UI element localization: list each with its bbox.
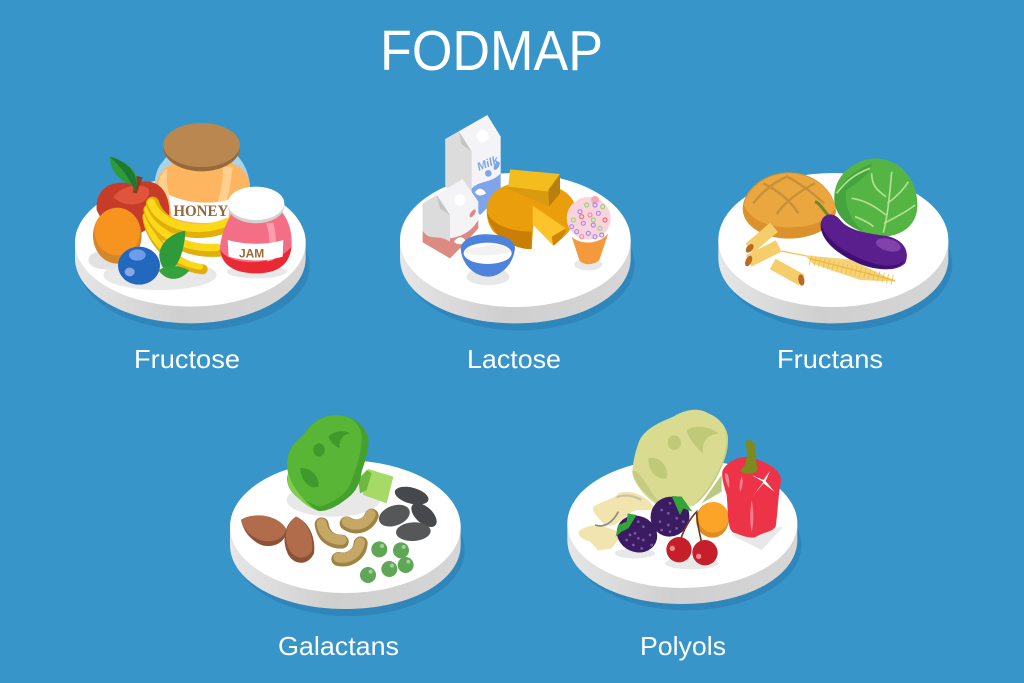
- plate: [567, 459, 801, 610]
- icon: peach orange: [93, 208, 142, 264]
- icon: apple: [97, 157, 169, 233]
- panel: lactose plate: [400, 115, 635, 330]
- icon: broccoli: [287, 415, 393, 511]
- icon: bowl of milk: [461, 234, 515, 277]
- icon: cheese wedge: [508, 169, 560, 207]
- panel: fructose plate: [75, 123, 310, 330]
- label: Fructans: Fructans: [777, 344, 883, 374]
- icon: cashews: [322, 514, 372, 560]
- icon: cheese wheel: [487, 183, 576, 249]
- icon: second blackberry: [645, 491, 695, 542]
- icon: honey jar: [155, 123, 250, 227]
- icon: banana leaves: [159, 231, 189, 279]
- icon: jam jar: JAM: [239, 246, 264, 260]
- icon: bread bun: [743, 172, 836, 239]
- label: Lactose: Lactose: [467, 344, 561, 374]
- label: Fructose: Fructose: [134, 344, 240, 374]
- icon: blackberry: [611, 509, 663, 559]
- label: Polyols: Polyols: [640, 631, 726, 661]
- icon: pasta tubes: [744, 227, 805, 286]
- icon: cabbage: [834, 158, 917, 237]
- icon: wheat ear: [782, 251, 897, 282]
- icon: sliced mushrooms: [578, 492, 654, 551]
- plate: [718, 173, 952, 330]
- plate: [230, 460, 465, 616]
- icon: apricot: [696, 502, 729, 538]
- icon: cherries: [666, 512, 718, 565]
- icon: almonds: [241, 515, 314, 563]
- icon: green peas: [360, 541, 414, 583]
- icon: small milk carton: [423, 179, 478, 258]
- icon: red bell pepper: [722, 440, 781, 538]
- plate: [400, 173, 635, 330]
- icon: blueberry: [118, 247, 160, 285]
- plate: [75, 178, 310, 330]
- panel: galactans plate: [230, 415, 465, 616]
- icon: cauliflower: [632, 410, 728, 507]
- panel: fructans plate: [718, 158, 952, 330]
- label: Galactans: Galactans: [278, 631, 399, 661]
- icon: eggplant: [815, 202, 907, 269]
- panel: polyols plate: [567, 410, 801, 610]
- icon: honey jar: HONEY: [173, 203, 228, 220]
- icon: large milk carton: [445, 115, 501, 215]
- icon: jam jar: [220, 187, 292, 273]
- title: FODMAP: [380, 19, 603, 83]
- icon: large milk carton: Milk: [476, 154, 501, 174]
- icon: ice cream cone: [567, 196, 611, 264]
- icon: sunflower seeds: [376, 483, 441, 542]
- icon: bananas: [146, 203, 231, 269]
